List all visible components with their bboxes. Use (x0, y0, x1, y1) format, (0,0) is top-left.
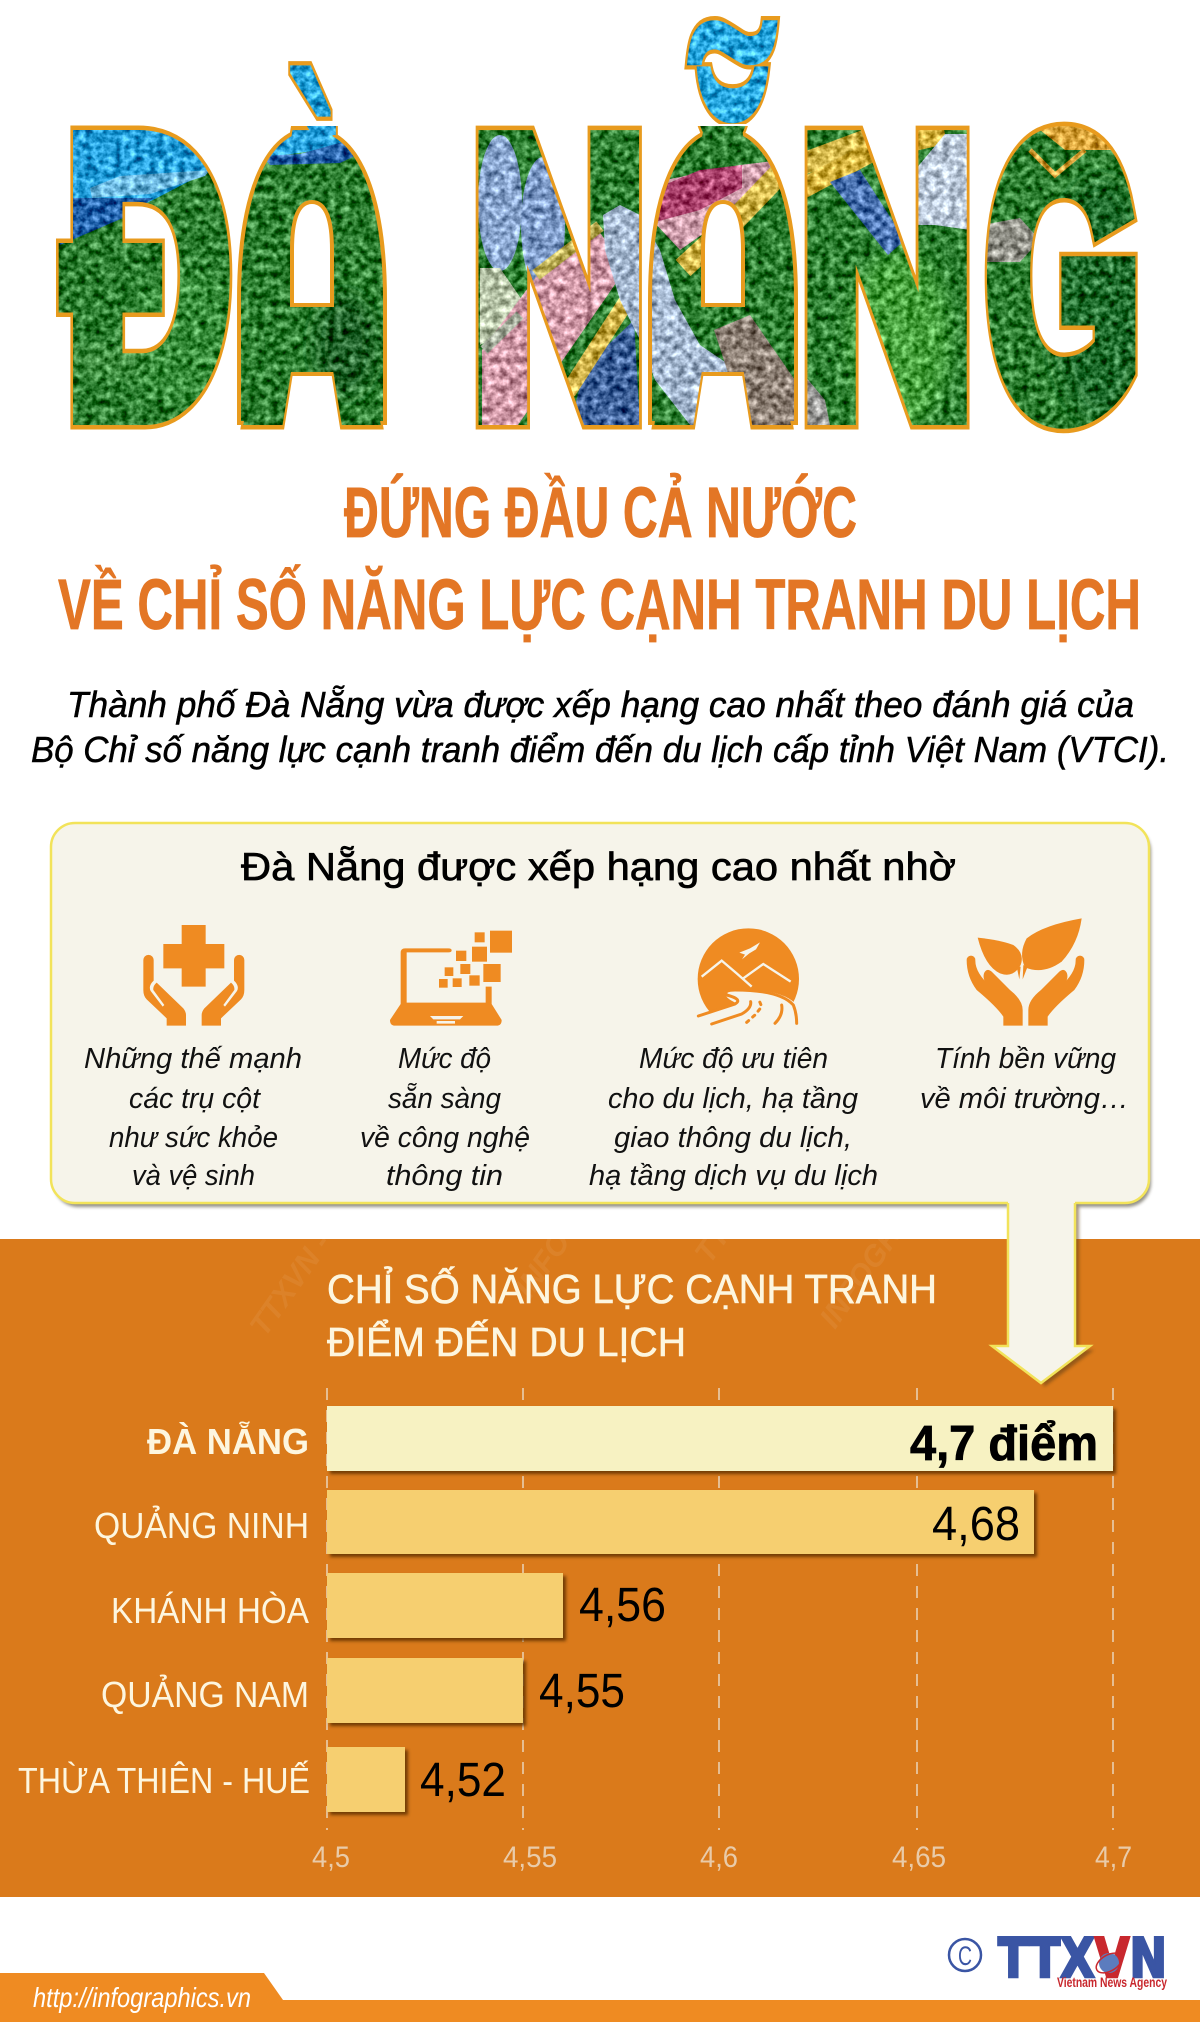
category labels: THỪA THIÊN - HUẾ (18, 1760, 310, 1801)
category labels (18, 1421, 310, 1801)
text: technology readiness: thông tin (386, 1160, 503, 1192)
intro text: Bộ Chỉ số năng lực cạnh tranh điểm đến du lịch cấp tỉnh Việt Nam (VTCI). (31, 729, 1169, 770)
subtitle line 1: ĐỨNG ĐẦU CẢ NƯỚC (344, 474, 857, 553)
footer bar with website (0, 1973, 1200, 2022)
text: strengths pillars (84, 1043, 302, 1192)
bar: Khánh Hòa (327, 1573, 563, 1638)
text: tourism priority and infrastructure: Mức độ ưu tiên (639, 1043, 828, 1075)
x axis labels: 4,5 (312, 1841, 350, 1874)
category labels: KHÁNH HÒA (111, 1590, 309, 1631)
text: technology readiness: về công nghệ (360, 1122, 530, 1154)
text: environmental sustainability: Tính bền vững (935, 1043, 1116, 1075)
watermarks: TTXVN (689, 1168, 773, 1269)
category labels: ĐÀ NẴNG (147, 1421, 309, 1462)
text: strengths pillars: như sức khỏe (109, 1122, 278, 1154)
text: strengths pillars: và vệ sinh (132, 1160, 255, 1192)
icon: hands holding medical cross (143, 925, 244, 1026)
x axis labels: 4,65 (892, 1841, 946, 1874)
watermarks: INFOGRAPHICS (814, 1127, 973, 1334)
title: ĐÀ NẴNG with photo-filled letters: N (471, 60, 647, 494)
title: ĐÀ NẴNG with photo-filled letters: Ẵ (630, 17, 835, 624)
x axis labels (312, 1841, 1132, 1874)
title: ĐÀ NẴNG with photo-filled letters (56, 16, 1138, 434)
text: strengths pillars: các trụ cột (129, 1083, 262, 1115)
value labels: 4,68 (932, 1498, 1020, 1551)
x axis labels: 4,7 (1095, 1841, 1132, 1874)
icon: mountain road and plane (693, 928, 803, 1030)
text: tourism priority and infrastructure (589, 1043, 878, 1192)
chart heading (327, 1266, 937, 1365)
orange chart section background (0, 1239, 1200, 1897)
title: ĐÀ NẴNG with photo-filled letters: Ẵ (659, 59, 786, 493)
value labels (420, 1417, 1098, 1807)
text: technology readiness: Mức độ (398, 1043, 491, 1075)
icon: hands with leaves (967, 918, 1084, 1026)
chart heading: ĐIỂM ĐẾN DU LỊCH (327, 1318, 686, 1365)
bar: Đà Nẵng (327, 1406, 1113, 1471)
text: tourism priority and infrastructure: cho du lịch, hạ tầng (608, 1083, 858, 1115)
title: ĐÀ NẴNG with photo-filled letters: N (800, 62, 974, 494)
value labels: 4,52 (420, 1754, 506, 1807)
text: tourism priority and infrastructure: hạ tầng dịch vụ du lịch (589, 1160, 878, 1192)
panel: reasons for top ranking (51, 823, 1151, 1207)
bar: Thừa Thiên - Huế (327, 1747, 405, 1812)
panel heading: Đà Nẵng được xếp hạng cao nhất nhờ (241, 845, 956, 889)
value labels: 4,55 (539, 1665, 625, 1718)
text: strengths pillars: Những thế mạnh (84, 1043, 302, 1075)
text: tourism priority and infrastructure: giao thông du lịch, (614, 1122, 852, 1154)
intro text: Thành phố Đà Nẵng vừa được xếp hạng cao nhất theo đánh giá của (67, 684, 1134, 725)
text: technology readiness: sẵn sàng (388, 1082, 501, 1115)
footer bar with website: http://infographics.vn (33, 1982, 251, 2013)
watermarks: INFOGRAPHICS (509, 1097, 668, 1304)
title: ĐÀ NẴNG with photo-filled letters: À (256, 60, 374, 471)
title: ĐÀ NẴNG with photo-filled letters: G (986, 61, 1141, 494)
bar chart (18, 1388, 1132, 1874)
chart heading: CHỈ SỐ NĂNG LỰC CẠNH TRANH (327, 1266, 937, 1312)
value labels: 4,56 (579, 1579, 666, 1632)
bar: Quảng Ninh (327, 1490, 1034, 1554)
text: environmental sustainability: về môi trường… (920, 1083, 1129, 1115)
x axis labels: 4,6 (700, 1841, 738, 1874)
icon: laptop with pixels (390, 931, 512, 1026)
value labels: 4,7 điểm (910, 1417, 1098, 1471)
hands and bridge (478, 135, 522, 271)
category labels: QUẢNG NAM (101, 1674, 309, 1715)
logo: TTXVN Vietnam News Agency: TTXVN (998, 1927, 1167, 1990)
category labels: QUẢNG NINH (94, 1505, 309, 1546)
arrow from panel to top bar (992, 1200, 1094, 1387)
bar: Quảng Nam (327, 1658, 523, 1723)
watermarks: TTXVN - INFOGRAPHICS (244, 1032, 474, 1342)
logo: TTXVN Vietnam News Agency: C (958, 1941, 972, 1971)
text: environmental sustainability (920, 1043, 1129, 1115)
title: ĐÀ NẴNG with photo-filled letters: À (248, 60, 376, 493)
watermarks (244, 1032, 973, 1342)
text: technology readiness (360, 1043, 530, 1192)
x axis labels: 4,55 (503, 1841, 557, 1874)
title: ĐÀ NẴNG with photo-filled letters: Đ (66, 61, 231, 494)
intro text (31, 684, 1169, 770)
